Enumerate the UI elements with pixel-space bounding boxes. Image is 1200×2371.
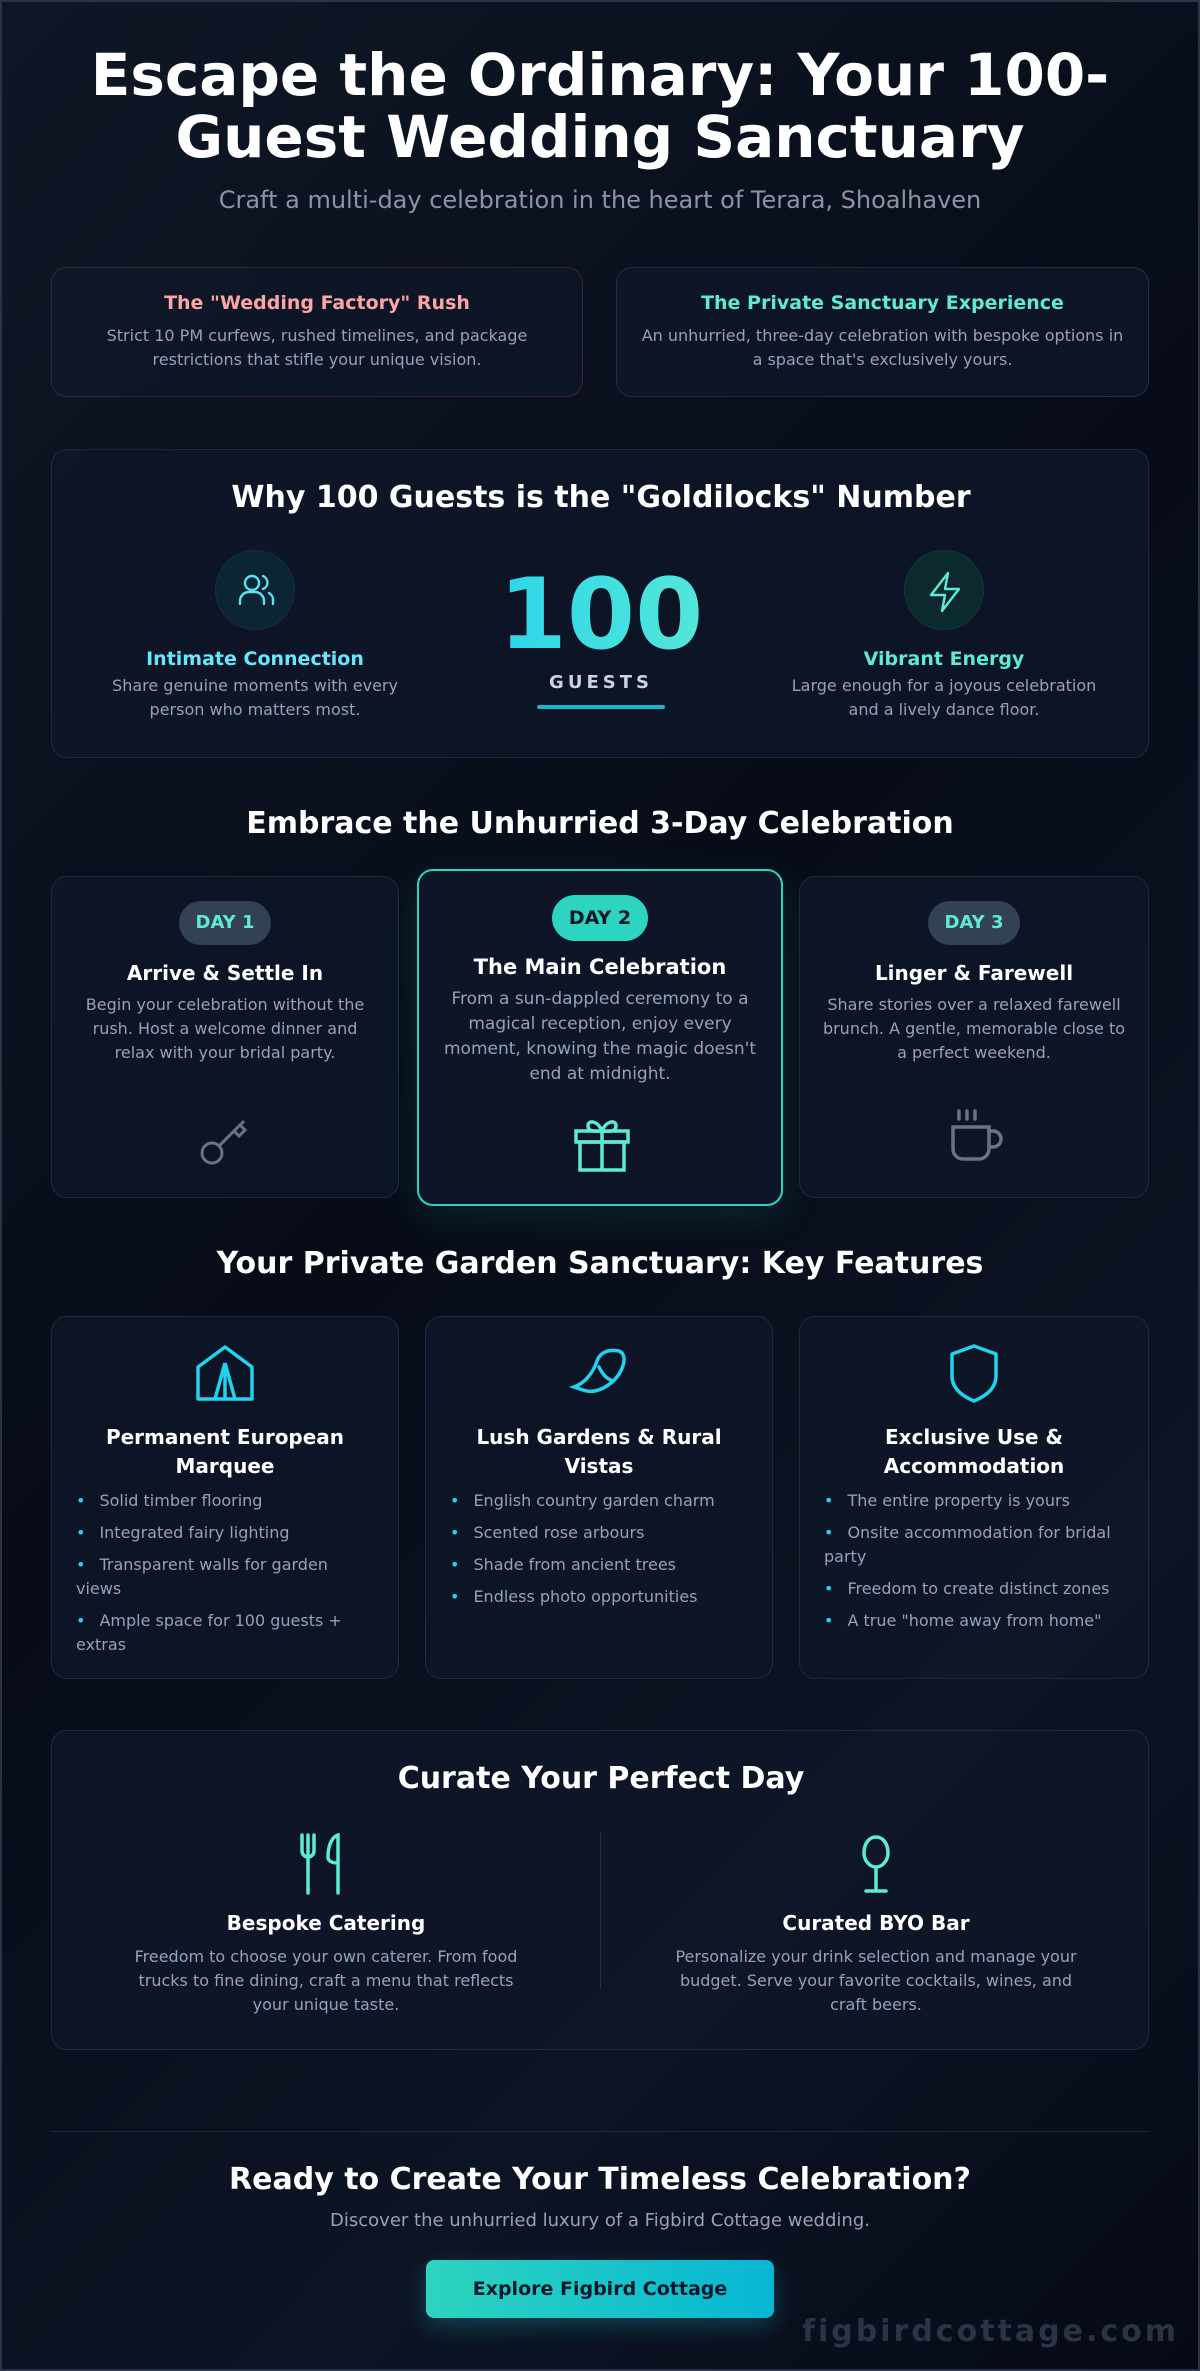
title: Escape the Ordinary: Your 100-	[91, 41, 1109, 109]
stat: 100 guests: GUESTS	[549, 672, 653, 693]
stat: 100 guests: 100	[499, 558, 703, 672]
text: day 1: Arrive & Settle In	[127, 961, 323, 985]
heading: sanctuary: The Private Sanctuary Experience	[701, 292, 1064, 314]
heading: 3-day celebration: Embrace the Unhurried 3-Day Celebration	[246, 806, 954, 841]
text: day 2: The Main Celebration	[474, 955, 726, 979]
icon: people	[215, 550, 295, 630]
icon: wine glass	[862, 1835, 890, 1893]
panel: exclusive use	[799, 1316, 1149, 1679]
text: intimate connection	[112, 648, 398, 719]
subtitle: Craft a multi-day celebration in the heart of Terara, Shoalhaven	[219, 186, 981, 214]
text: vibrant energy: Vibrant Energy	[864, 648, 1024, 670]
panel: marquee: Transparent walls for garden views	[76, 1555, 328, 1598]
text: exclusive: Exclusive Use & Accommodation	[884, 1425, 1064, 1478]
text: factory: Strict 10 PM curfews, rushed timelines, and package restrictions that stifle your unique vision.	[107, 326, 527, 369]
text: byo bar: Curated BYO Bar	[782, 1911, 970, 1935]
text: catering: Freedom to choose your own caterer. From food trucks to fine dining, craft a menu that reflects your unique taste.	[135, 1947, 517, 2014]
panel: day 2: From a sun-dappled ceremony to a magical reception, enjoy every moment, knowing the magic doesn't end at midnight.	[444, 989, 756, 1084]
text: catering: Bespoke Catering	[227, 1911, 425, 1935]
panel: day 3	[799, 876, 1149, 1198]
icon: shield	[950, 1344, 998, 1403]
text: vibrant energy	[792, 648, 1096, 719]
icon: utensils	[300, 1833, 340, 1895]
badge: day 2	[552, 895, 648, 941]
panel: day 2	[417, 869, 783, 1206]
panel: exclusive use: Onsite accommodation for bridal party	[824, 1523, 1111, 1566]
text: catering	[135, 1911, 517, 2014]
text: byo bar	[675, 1911, 1077, 2014]
panel: gardens: English country garden charm	[473, 1491, 715, 1510]
icon: tent	[196, 1345, 254, 1401]
panel: curate	[51, 1730, 1149, 2050]
title	[91, 41, 1109, 171]
panel: marquee: Solid timber flooring	[99, 1491, 262, 1510]
panel: wedding factory rush	[51, 267, 583, 397]
badge: day 3	[928, 901, 1020, 945]
icon: coffee cup	[951, 1109, 1003, 1161]
panel: gardens: Shade from ancient trees	[473, 1555, 676, 1574]
watermark: figbirdcottage.com	[802, 2314, 1179, 2349]
panel: day 1: Begin your celebration without the rush. Host a welcome dinner and relax with your bridal party.	[86, 995, 364, 1062]
icon: key	[200, 1120, 247, 1164]
cta button	[426, 2260, 774, 2318]
title: Guest Wedding Sanctuary	[176, 103, 1024, 171]
panel: gardens: Scented rose arbours	[473, 1523, 644, 1542]
text: gardens: Lush Gardens & Rural Vistas	[476, 1425, 722, 1478]
heading: goldilocks: Why 100 Guests is the "Goldilocks" Number	[231, 480, 971, 515]
panel: day 3: Share stories over a relaxed farewell brunch. A gentle, memorable close to a perfect weekend.	[823, 995, 1125, 1062]
icon: leaf	[569, 1348, 626, 1394]
badge: day 1: DAY 1	[196, 912, 254, 933]
text: intimate connection: Intimate Connection	[146, 648, 364, 670]
panel: exclusive use: Freedom to create distinct zones	[847, 1579, 1110, 1598]
text: intimate connection: Share genuine moments with every person who matters most.	[112, 676, 398, 719]
heading: factory: The "Wedding Factory" Rush	[164, 292, 470, 314]
icon: lightning	[904, 550, 984, 630]
panel: gardens	[425, 1316, 773, 1679]
badge: day 2: DAY 2	[569, 907, 631, 929]
panel: day 1	[51, 876, 399, 1198]
panel: private sanctuary	[616, 267, 1149, 397]
panel: marquee	[51, 1316, 399, 1679]
text: byo bar: Personalize your drink selection and manage your budget. Serve your favorite cocktails, wines, and craft beers.	[675, 1947, 1077, 2014]
text: sanctuary: An unhurried, three-day celebration with bespoke options in a space that's exclusively yours.	[642, 326, 1123, 369]
heading: key features: Your Private Garden Sanctuary: Key Features	[217, 1246, 983, 1281]
panel: marquee: Ample space for 100 guests + extras	[76, 1611, 342, 1654]
panel: marquee: Integrated fairy lighting	[99, 1523, 290, 1542]
heading: curate: Curate Your Perfect Day	[398, 1761, 804, 1796]
text: day 3: Linger & Farewell	[875, 961, 1073, 985]
icon: gift	[574, 1120, 630, 1172]
panel: exclusive use: The entire property is yours	[847, 1491, 1070, 1510]
badge: day 3: DAY 3	[944, 912, 1003, 933]
panel: goldilocks	[51, 449, 1149, 758]
text: vibrant energy: Large enough for a joyous celebration and a lively dance floor.	[792, 676, 1096, 719]
cta subtitle: Discover the unhurried luxury of a Figbird Cottage wedding.	[330, 2210, 870, 2231]
cta heading: Ready to Create Your Timeless Celebration?	[229, 2162, 971, 2197]
panel: gardens: Endless photo opportunities	[473, 1587, 698, 1606]
badge: day 1	[179, 901, 271, 945]
text: marquee: Permanent European Marquee	[106, 1425, 344, 1478]
panel: exclusive use: A true "home away from home"	[847, 1611, 1101, 1630]
cta button: Explore Figbird Cottage	[473, 2278, 727, 2300]
